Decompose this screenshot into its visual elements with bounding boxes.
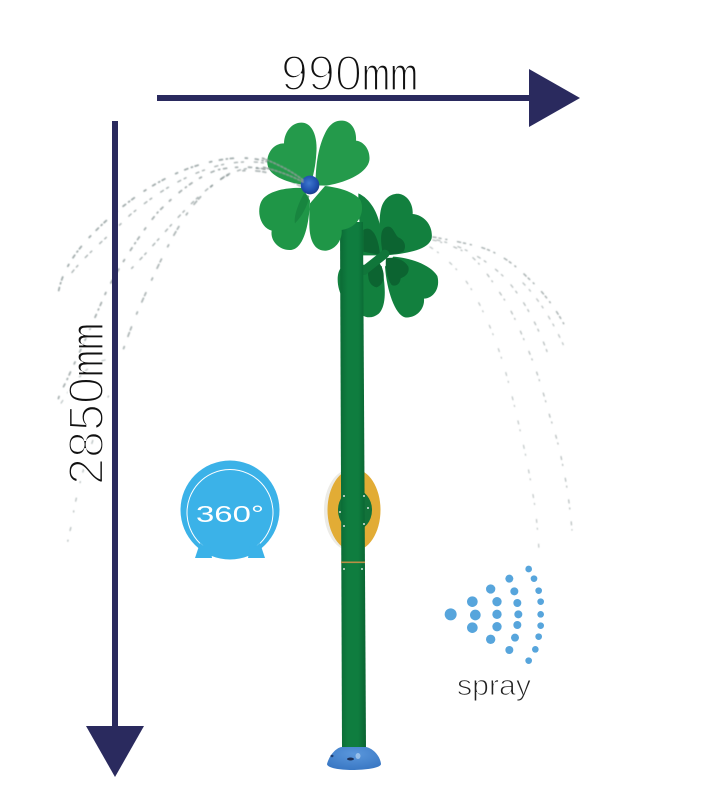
badge: 360 degree rotation: 360° (196, 501, 264, 527)
pole fittings: gold band and rivets (339, 495, 369, 570)
dimension label: 2850mm: mm (61, 323, 113, 377)
badge: 360 degree rotation (180, 460, 280, 560)
pole (340, 222, 366, 748)
dimension label: 990mm (281, 47, 418, 101)
front clover with blue hub (259, 121, 370, 251)
dimension arrow: width (157, 69, 580, 127)
rear clover and arm (338, 193, 438, 317)
spray label: spray (457, 670, 532, 702)
icon: spray dots (445, 566, 544, 664)
yellow wheel panel on pole (324, 469, 380, 551)
dimension label: 2850mm: 2850 (60, 377, 114, 485)
water spray leaving front hub (262, 158, 303, 182)
dimension arrow: height (86, 121, 144, 777)
blue dome base (327, 747, 381, 770)
dimension label: 990mm: 990 (281, 47, 362, 101)
water spray: right arcs (430, 237, 572, 550)
dimension label: 990mm: mm (362, 48, 418, 100)
dimension label: 2850mm (60, 323, 114, 485)
water spray: left arcs (58, 158, 300, 547)
